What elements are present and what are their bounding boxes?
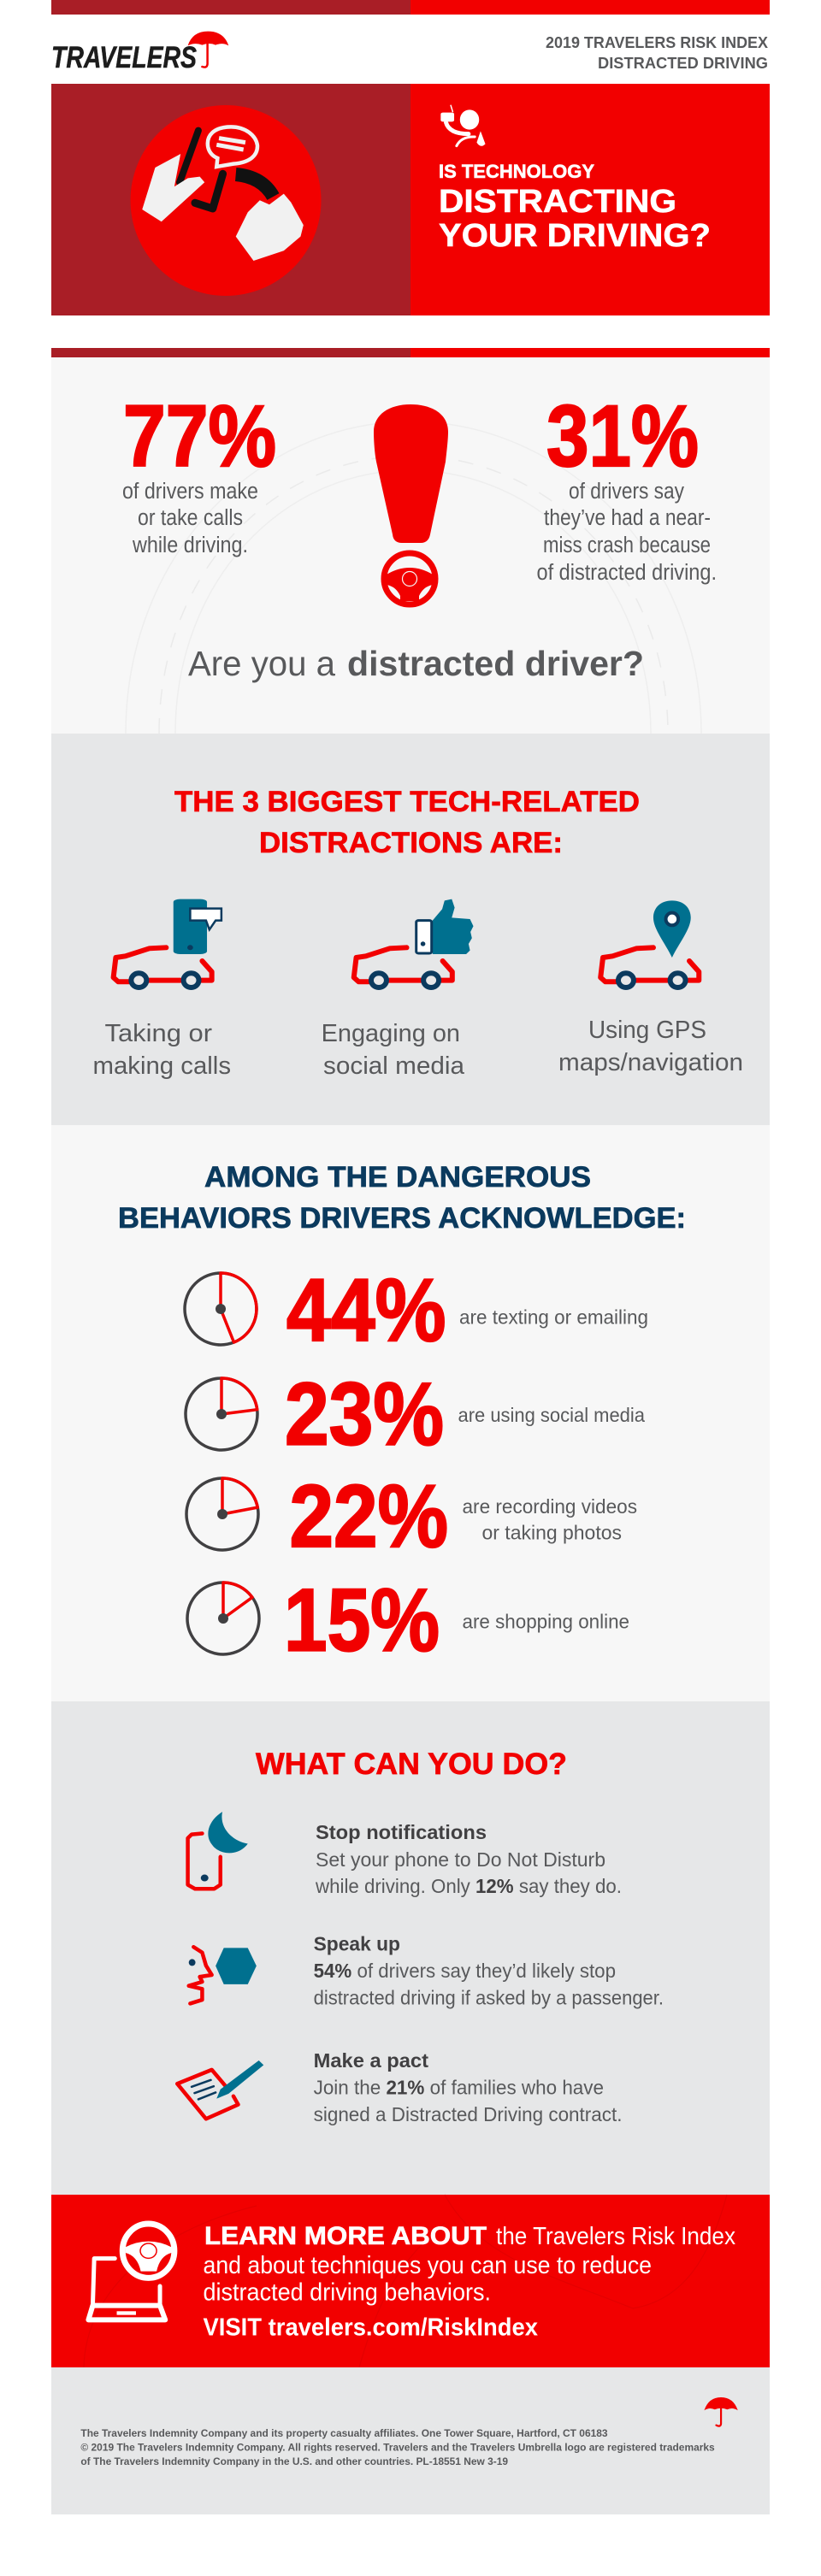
label: social media: social media	[323, 1052, 465, 1080]
hero title: YOUR DRIVING?	[439, 218, 711, 254]
label: calls	[92, 1020, 231, 1080]
row: 44 percent	[185, 1261, 648, 1360]
heading: THE 3 BIGGEST TECH-RELATED	[174, 786, 640, 818]
statistic: 77 percent	[122, 387, 276, 557]
label: GPS: Using GPS	[588, 1017, 706, 1044]
statistic: 31 percent: they’ve had a near-	[544, 506, 711, 530]
tip: make a pact: Join the 21% of families who have	[314, 2077, 604, 2099]
statistic: 31 percent: miss crash because	[543, 533, 711, 557]
panel: dangerous behaviors	[51, 1125, 770, 1701]
heading	[118, 1161, 686, 1235]
statistic: 31 percent: of distracted driving.	[537, 561, 717, 585]
panel: hero	[51, 84, 770, 315]
row: 22 percent: or taking photos	[482, 1522, 622, 1544]
row: 23 percent: 23%	[285, 1365, 444, 1464]
label: social media	[322, 1020, 465, 1080]
tip: stop notifications: while driving. Only 12% say they do.	[315, 1875, 622, 1897]
panel: three biggest distractions	[51, 734, 770, 1125]
label: calls: making calls	[92, 1052, 231, 1080]
statistic: 31 percent: of drivers say	[569, 480, 684, 504]
row: 15 percent: are shopping online	[462, 1611, 629, 1633]
statistic: 77 percent: of drivers make	[122, 480, 258, 504]
pie clock: 23 percent	[186, 1378, 257, 1450]
header label	[546, 34, 768, 72]
row: 15 percent	[187, 1571, 629, 1671]
call to action text: LEARN MORE ABOUT	[204, 2222, 487, 2250]
heading: BEHAVIORS DRIVERS ACKNOWLEDGE:	[118, 1202, 686, 1235]
hero title: DISTRACTING	[439, 184, 676, 220]
icon: exclamation mark with steering wheel	[374, 404, 448, 604]
pie clock: 22 percent	[186, 1478, 258, 1550]
call to action text: the Travelers Risk Index	[496, 2223, 735, 2250]
tip: speak up: distracted driving if asked by a passenger.	[314, 1987, 664, 2009]
second colour bar	[51, 348, 770, 357]
question text: distracted driver?	[347, 644, 644, 683]
panel: what can you do	[51, 1701, 770, 2195]
heading: AMONG THE DANGEROUS	[204, 1161, 591, 1194]
tip: make a pact: signed a Distracted Driving contract.	[314, 2103, 623, 2125]
call to action text	[204, 2222, 735, 2342]
header label: DISTRACTED DRIVING	[598, 55, 768, 72]
heading: WHAT CAN YOU DO?	[256, 1748, 567, 1781]
label: GPS: maps/navigation	[558, 1049, 743, 1076]
label: GPS	[558, 1017, 743, 1076]
row: 22 percent	[186, 1467, 637, 1566]
statistic: 77 percent: or take calls	[138, 506, 243, 530]
statistic: 77 percent: 77%	[123, 387, 276, 485]
top colour bar	[51, 0, 770, 15]
icon: phone with moon	[188, 1812, 248, 1889]
icon: distracted driver taking selfie	[440, 105, 486, 146]
tip: speak up	[314, 1933, 664, 2009]
statistic: 77 percent: while driving.	[132, 533, 248, 557]
logo: Travelers: TRAVELERS	[51, 41, 197, 74]
tip: make a pact: Make a pact	[314, 2049, 428, 2072]
label: calls: Taking or	[104, 1020, 212, 1047]
tip: stop notifications: Stop notifications	[316, 1821, 487, 1843]
row: 44 percent: are texting or emailing	[459, 1306, 648, 1329]
icon: signing a contract	[177, 2060, 263, 2119]
icon: car with phone	[114, 899, 221, 987]
icon: laptop with steering wheel	[88, 2224, 174, 2320]
row: 22 percent: 22%	[289, 1467, 448, 1566]
panel: learn more call to action	[51, 2195, 770, 2367]
legal text: of The Travelers Indemnity Company in the U.S. and other countries. PL-18551 New 3-19	[80, 2455, 508, 2467]
tip: make a pact	[314, 2049, 623, 2125]
tip: speak up: Speak up	[314, 1933, 400, 1955]
tip: stop notifications: Set your phone to Do Not Disturb	[316, 1848, 605, 1871]
row: 23 percent: are using social media	[458, 1404, 646, 1426]
pie clock: 44 percent	[185, 1273, 257, 1345]
row: 22 percent: are recording videos	[462, 1495, 637, 1518]
panel: distracted driver statistics	[51, 357, 770, 734]
icon: speaking face with stop sign	[189, 1947, 257, 2003]
header label: 2019 TRAVELERS RISK INDEX	[546, 34, 768, 51]
statistic: 31 percent	[537, 387, 717, 585]
call to action text: distracted driving behaviors.	[204, 2279, 491, 2307]
icon: car with thumbs up	[354, 899, 473, 987]
legal text: The Travelers Indemnity Company and its property casualty affiliates. One Tower Square, Hartford, CT 06183	[80, 2427, 608, 2439]
row: 23 percent	[186, 1365, 646, 1464]
panel: footer	[51, 2367, 770, 2514]
icon: hands holding phone in red circle	[130, 105, 322, 296]
pie clock: 15 percent	[187, 1583, 259, 1654]
heading: DISTRACTIONS ARE:	[259, 827, 563, 859]
legal text: © 2019 The Travelers Indemnity Company. All rights reserved. Travelers and the Travelers Umbrella logo are registered trademarks	[80, 2442, 715, 2454]
call to action text: VISIT travelers.com/RiskIndex	[204, 2314, 538, 2342]
call to action text: and about techniques you can use to reduce	[204, 2252, 652, 2279]
heading	[174, 786, 640, 859]
label: social media: Engaging on	[322, 1020, 460, 1047]
icon: car with map pin	[600, 900, 699, 987]
statistic: 31 percent: 31%	[546, 387, 699, 485]
legal text	[80, 2427, 715, 2467]
row: 44 percent: 44%	[286, 1261, 446, 1360]
icon: red umbrella	[704, 2397, 738, 2426]
hero title: IS TECHNOLOGY	[439, 161, 594, 182]
tip: speak up: 54% of drivers say they’d likely stop	[314, 1960, 616, 1982]
question text	[188, 644, 644, 683]
question text: Are you a	[188, 644, 335, 683]
row: 15 percent: 15%	[284, 1571, 440, 1671]
tip: stop notifications	[315, 1821, 622, 1897]
hero title	[439, 161, 711, 254]
